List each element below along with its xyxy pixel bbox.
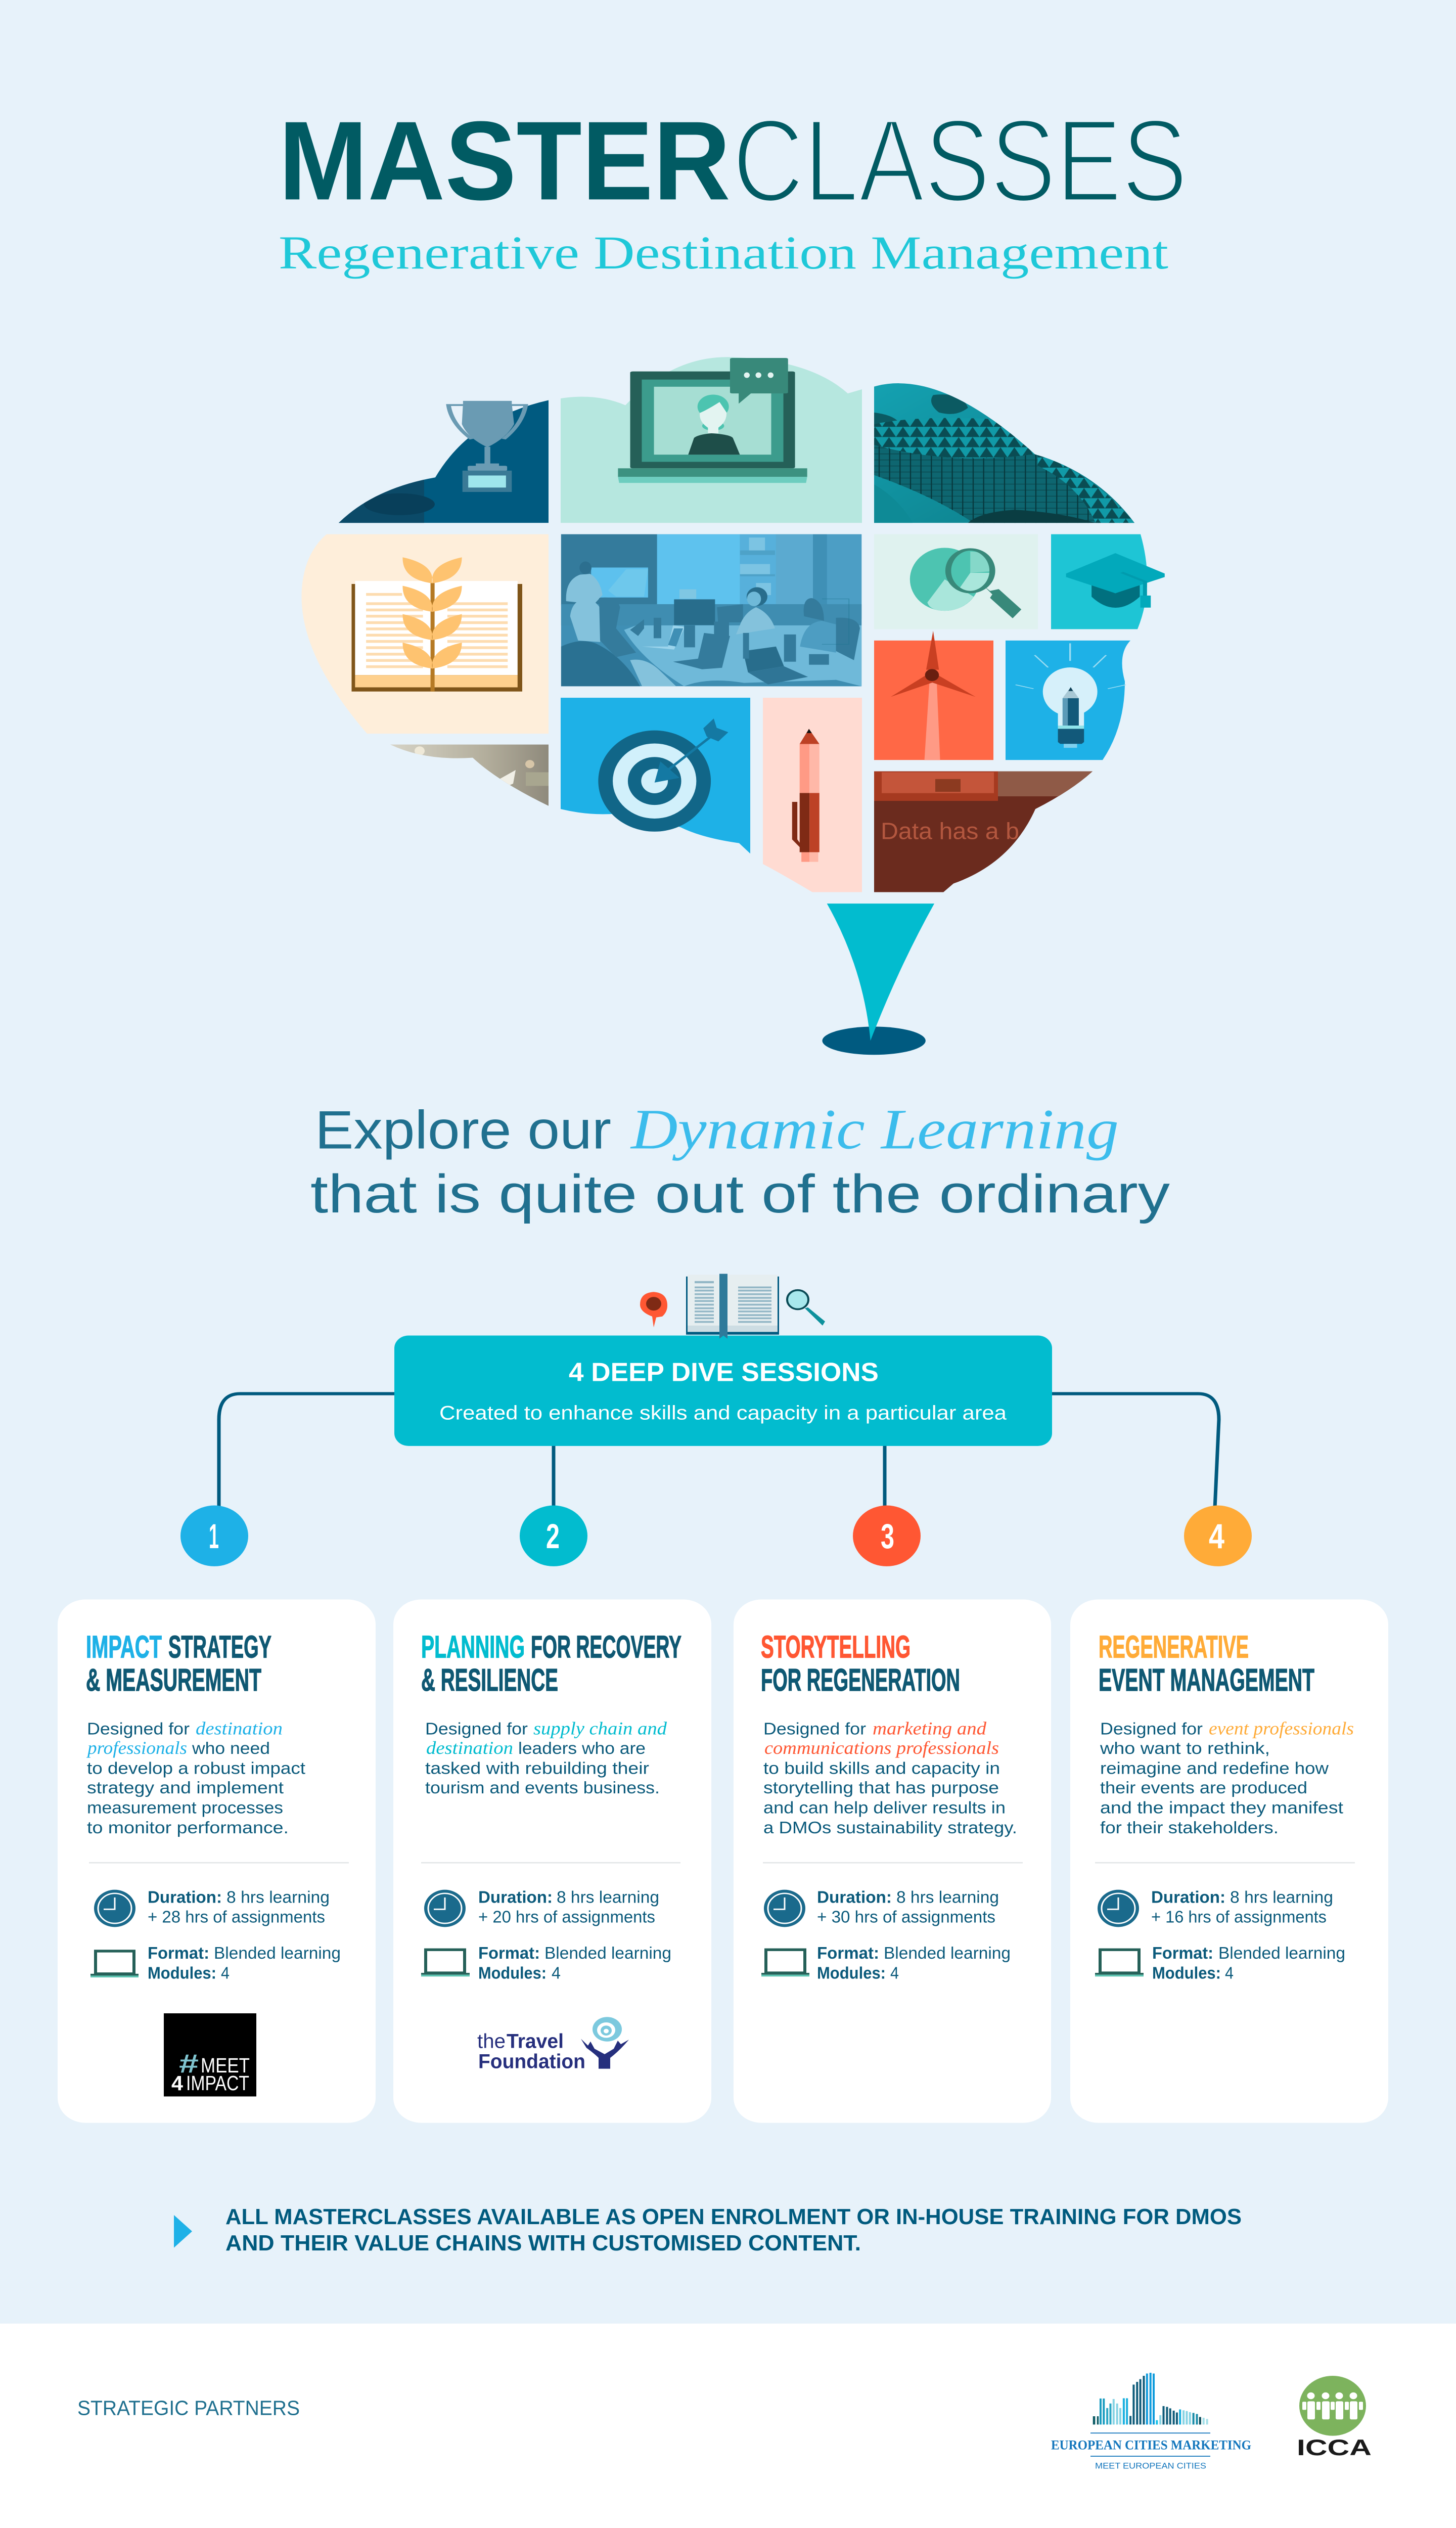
panel: 4 deep dive sessions: 4 DEEP DIVE SESSIONS — [569, 1357, 879, 1387]
number badge 2 — [520, 1506, 587, 1566]
logo: european cities marketing: EUROPEAN CITIES MARKETING — [1051, 2437, 1251, 2452]
icon: speech bubble — [730, 358, 788, 403]
icon: pen — [792, 729, 820, 862]
card 3 description: marketing and — [873, 1719, 987, 1739]
duration text: 8 hrs learning — [226, 1888, 330, 1907]
card 2 heading: PLANNING — [421, 1630, 525, 1664]
logo: european cities marketing: MEET EUROPEAN CITIES — [1095, 2461, 1206, 2470]
footer band — [0, 2324, 1456, 2528]
panel: card 3 storytelling — [734, 1600, 1051, 2123]
number badge 4 — [1184, 1506, 1252, 1566]
icon: graduation cap — [1066, 553, 1165, 608]
format text: Modules: — [148, 1964, 216, 1982]
icon: laptop — [421, 1950, 470, 1976]
card 3 heading: FOR REGENERATION — [761, 1662, 960, 1697]
card 4 description: event professionals — [1209, 1719, 1354, 1739]
duration text: + 16 hrs of assignments — [1151, 1908, 1327, 1926]
logo: the travel foundation: Travel — [507, 2029, 564, 2052]
connector lines — [219, 1394, 1219, 1508]
duration text — [148, 1888, 330, 1926]
card 1 description: who need — [192, 1739, 270, 1758]
cloud illustration — [298, 354, 1165, 892]
duration text: + 28 hrs of assignments — [148, 1908, 325, 1926]
card 2 description: tasked with rebuilding their — [425, 1759, 649, 1778]
format text: Format: — [478, 1944, 540, 1963]
card 4 description — [1100, 1719, 1354, 1837]
format text: Blended learning — [544, 1944, 671, 1963]
format text: Modules: — [817, 1964, 886, 1982]
duration text — [478, 1888, 659, 1926]
card 1 heading — [86, 1630, 271, 1697]
tile: data photo — [874, 772, 1093, 892]
title: MASTER — [279, 98, 731, 223]
duration text: Duration: — [478, 1888, 553, 1907]
title: CLASSES — [733, 95, 1188, 227]
logo: the travel foundation — [477, 2017, 629, 2072]
card 2 description: tourism and events business. — [425, 1779, 660, 1797]
logo: the travel foundation: the — [477, 2029, 506, 2052]
duration text: 8 hrs learning — [1230, 1888, 1333, 1907]
icon: pie chart magnifier — [910, 548, 1021, 618]
card 4 description: Designed for — [1100, 1720, 1203, 1738]
card 3 description: a DMOs sustainability strategy. — [763, 1819, 1017, 1837]
format text: Blended learning — [1218, 1944, 1345, 1963]
icon: laptop with video call — [618, 358, 807, 483]
number badge 1 — [180, 1506, 248, 1566]
number badge 3 — [853, 1506, 921, 1566]
duration text: Duration: — [148, 1888, 222, 1907]
heading: dynamic learning: that is quite out of the ordinary — [310, 1164, 1170, 1224]
card 1 description: measurement processes — [87, 1798, 283, 1817]
panel: card 4 regenerative events — [1070, 1600, 1388, 2123]
number badge 4: 4 — [1209, 1518, 1224, 1556]
tile: target background — [561, 698, 750, 854]
tile: pen background — [763, 698, 862, 892]
number badge 3: 3 — [881, 1518, 894, 1556]
icon: trophy — [448, 401, 526, 492]
icon: clock — [424, 1890, 466, 1927]
duration text: Duration: — [817, 1888, 892, 1907]
logo: meet 4 impact: # — [178, 2049, 198, 2078]
tile: laptop background — [561, 354, 862, 523]
logo: european cities marketing — [1051, 2373, 1251, 2470]
panel: 4 deep dive sessions — [394, 1336, 1052, 1446]
card 2 heading: & RESILIENCE — [421, 1662, 558, 1697]
logo: icca: ICCA — [1297, 2435, 1372, 2460]
icon: map pin — [640, 1292, 667, 1327]
format text — [148, 1944, 341, 1982]
format text — [478, 1944, 671, 1982]
format text: Modules: — [1152, 1964, 1221, 1982]
number badge 2: 2 — [546, 1518, 560, 1556]
format text: Format: — [1152, 1944, 1213, 1963]
tile: grey photo — [390, 745, 549, 806]
card 1 heading: STRATEGY — [168, 1630, 271, 1664]
card 2 heading: FOR RECOVERY — [531, 1630, 681, 1664]
format text: 4 — [221, 1964, 230, 1982]
icon: target with arrow — [598, 718, 729, 832]
card 2 heading — [421, 1630, 681, 1697]
card 2 description: Designed for — [425, 1720, 528, 1738]
callout text: ALL MASTERCLASSES AVAILABLE AS OPEN ENROLMENT OR IN-HOUSE TRAINING FOR DMOS — [225, 2204, 1242, 2229]
tile: meeting photo — [561, 534, 861, 686]
card 3 description — [763, 1719, 1017, 1837]
heading: dynamic learning — [310, 1097, 1170, 1224]
format text: Blended learning — [214, 1944, 341, 1963]
callout text: AND THEIR VALUE CHAINS WITH CUSTOMISED CONTENT. — [225, 2231, 861, 2255]
tile: data photo: Data has a b — [881, 818, 1019, 844]
tile: chart background — [874, 534, 1038, 629]
card 4 description: and the impact they manifest — [1100, 1798, 1343, 1817]
card 4 heading — [1099, 1630, 1314, 1697]
card 1 description: to monitor performance. — [87, 1819, 289, 1837]
duration text: 8 hrs learning — [557, 1888, 659, 1907]
logo: icca — [1297, 2376, 1372, 2460]
icon: clock — [764, 1890, 805, 1927]
card 3 description: communications professionals — [764, 1738, 999, 1758]
footer label: strategic partners: STRATEGIC PARTNERS — [77, 2397, 300, 2420]
card 1 description: professionals — [86, 1738, 187, 1758]
format text — [1152, 1944, 1345, 1982]
card 4 heading: REGENERATIVE — [1099, 1630, 1249, 1664]
icon: book with wheat — [351, 557, 522, 692]
card 4 description: reimagine and redefine how — [1100, 1759, 1329, 1778]
logo: meet 4 impact: MEET — [201, 2054, 250, 2077]
format text: 4 — [890, 1964, 899, 1982]
duration text: 8 hrs learning — [896, 1888, 999, 1907]
panel: card 1 impact strategy — [58, 1600, 376, 2123]
card 2 description: leaders who are — [518, 1739, 646, 1758]
card 1 description: destination — [196, 1719, 283, 1739]
card 2 description — [425, 1719, 667, 1797]
card 2 description: supply chain and — [533, 1719, 667, 1739]
duration text — [817, 1888, 999, 1926]
tile: building photo — [874, 377, 1134, 523]
callout text — [225, 2204, 1242, 2255]
duration text — [1151, 1888, 1333, 1926]
title — [279, 95, 1188, 227]
card 1 description: strategy and implement — [87, 1779, 284, 1797]
card 4 description: for their stakeholders. — [1100, 1819, 1279, 1837]
icon: laptop — [90, 1951, 139, 1977]
format text: Modules: — [478, 1964, 547, 1982]
tile: graduation cap background — [1051, 534, 1152, 629]
icon: laptop — [1095, 1950, 1144, 1976]
card 1 description — [86, 1719, 305, 1837]
card 1 description: Designed for — [87, 1720, 190, 1738]
card 3 heading — [761, 1630, 960, 1697]
cloud tiles clipped to cloud outline — [298, 354, 1152, 892]
skyline bars — [1093, 2373, 1208, 2424]
icon: open book — [686, 1274, 779, 1339]
duration text: + 30 hrs of assignments — [817, 1908, 995, 1926]
card 3 description: and can help deliver results in — [763, 1798, 1006, 1817]
format text: 4 — [1225, 1964, 1234, 1982]
tile: trophy background — [334, 391, 549, 523]
logo: the travel foundation: Foundation — [478, 2050, 585, 2072]
duration text: + 20 hrs of assignments — [478, 1908, 655, 1926]
logo: meet 4 impact: 4 — [171, 2072, 183, 2095]
card 1 heading: IMPACT — [86, 1630, 162, 1664]
tile: wheat book background — [298, 534, 549, 734]
format text: Format: — [817, 1944, 879, 1963]
logo: meet 4 impact: IMPACT — [186, 2072, 249, 2095]
logo: meet 4 impact — [164, 2013, 256, 2096]
icon: cloud stem and base — [822, 904, 934, 1055]
card 3 description: to build skills and capacity in — [763, 1759, 1000, 1778]
icon: clock — [1098, 1890, 1139, 1927]
card 2 description: destination — [426, 1738, 513, 1758]
duration text: Duration: — [1151, 1888, 1225, 1907]
format text: Blended learning — [884, 1944, 1011, 1963]
subtitle: Regenerative Destination Management — [279, 227, 1168, 279]
card 3 description: Designed for — [763, 1720, 866, 1738]
card 4 description: who want to rethink, — [1100, 1739, 1270, 1758]
panel: card 2 planning — [393, 1600, 711, 2123]
heading: dynamic learning: Dynamic Learning — [630, 1097, 1119, 1161]
format text — [817, 1944, 1011, 1982]
icon: magnifying glass — [787, 1290, 825, 1326]
card 1 heading: & MEASUREMENT — [86, 1662, 261, 1697]
panel: 4 deep dive sessions: Created to enhance skills and capacity in a particular area — [439, 1402, 1007, 1424]
heading: dynamic learning: Explore our — [315, 1100, 611, 1160]
icon: laptop — [761, 1950, 809, 1976]
card 3 description: storytelling that has purpose — [763, 1779, 999, 1797]
icon: light bulb with pencil — [1016, 643, 1126, 748]
icon: clock — [94, 1890, 135, 1927]
number badge 1: 1 — [209, 1518, 219, 1556]
callout arrow — [174, 2215, 192, 2248]
icon: wind turbine — [891, 631, 976, 760]
tile: light bulb background — [1006, 641, 1130, 760]
card 1 description: to develop a robust impact — [87, 1759, 305, 1778]
card 4 description: their events are produced — [1100, 1779, 1307, 1797]
format text: Format: — [148, 1944, 209, 1963]
card 3 heading: STORYTELLING — [761, 1630, 911, 1664]
tile: wind turbine background — [874, 641, 993, 760]
format text: 4 — [552, 1964, 561, 1982]
